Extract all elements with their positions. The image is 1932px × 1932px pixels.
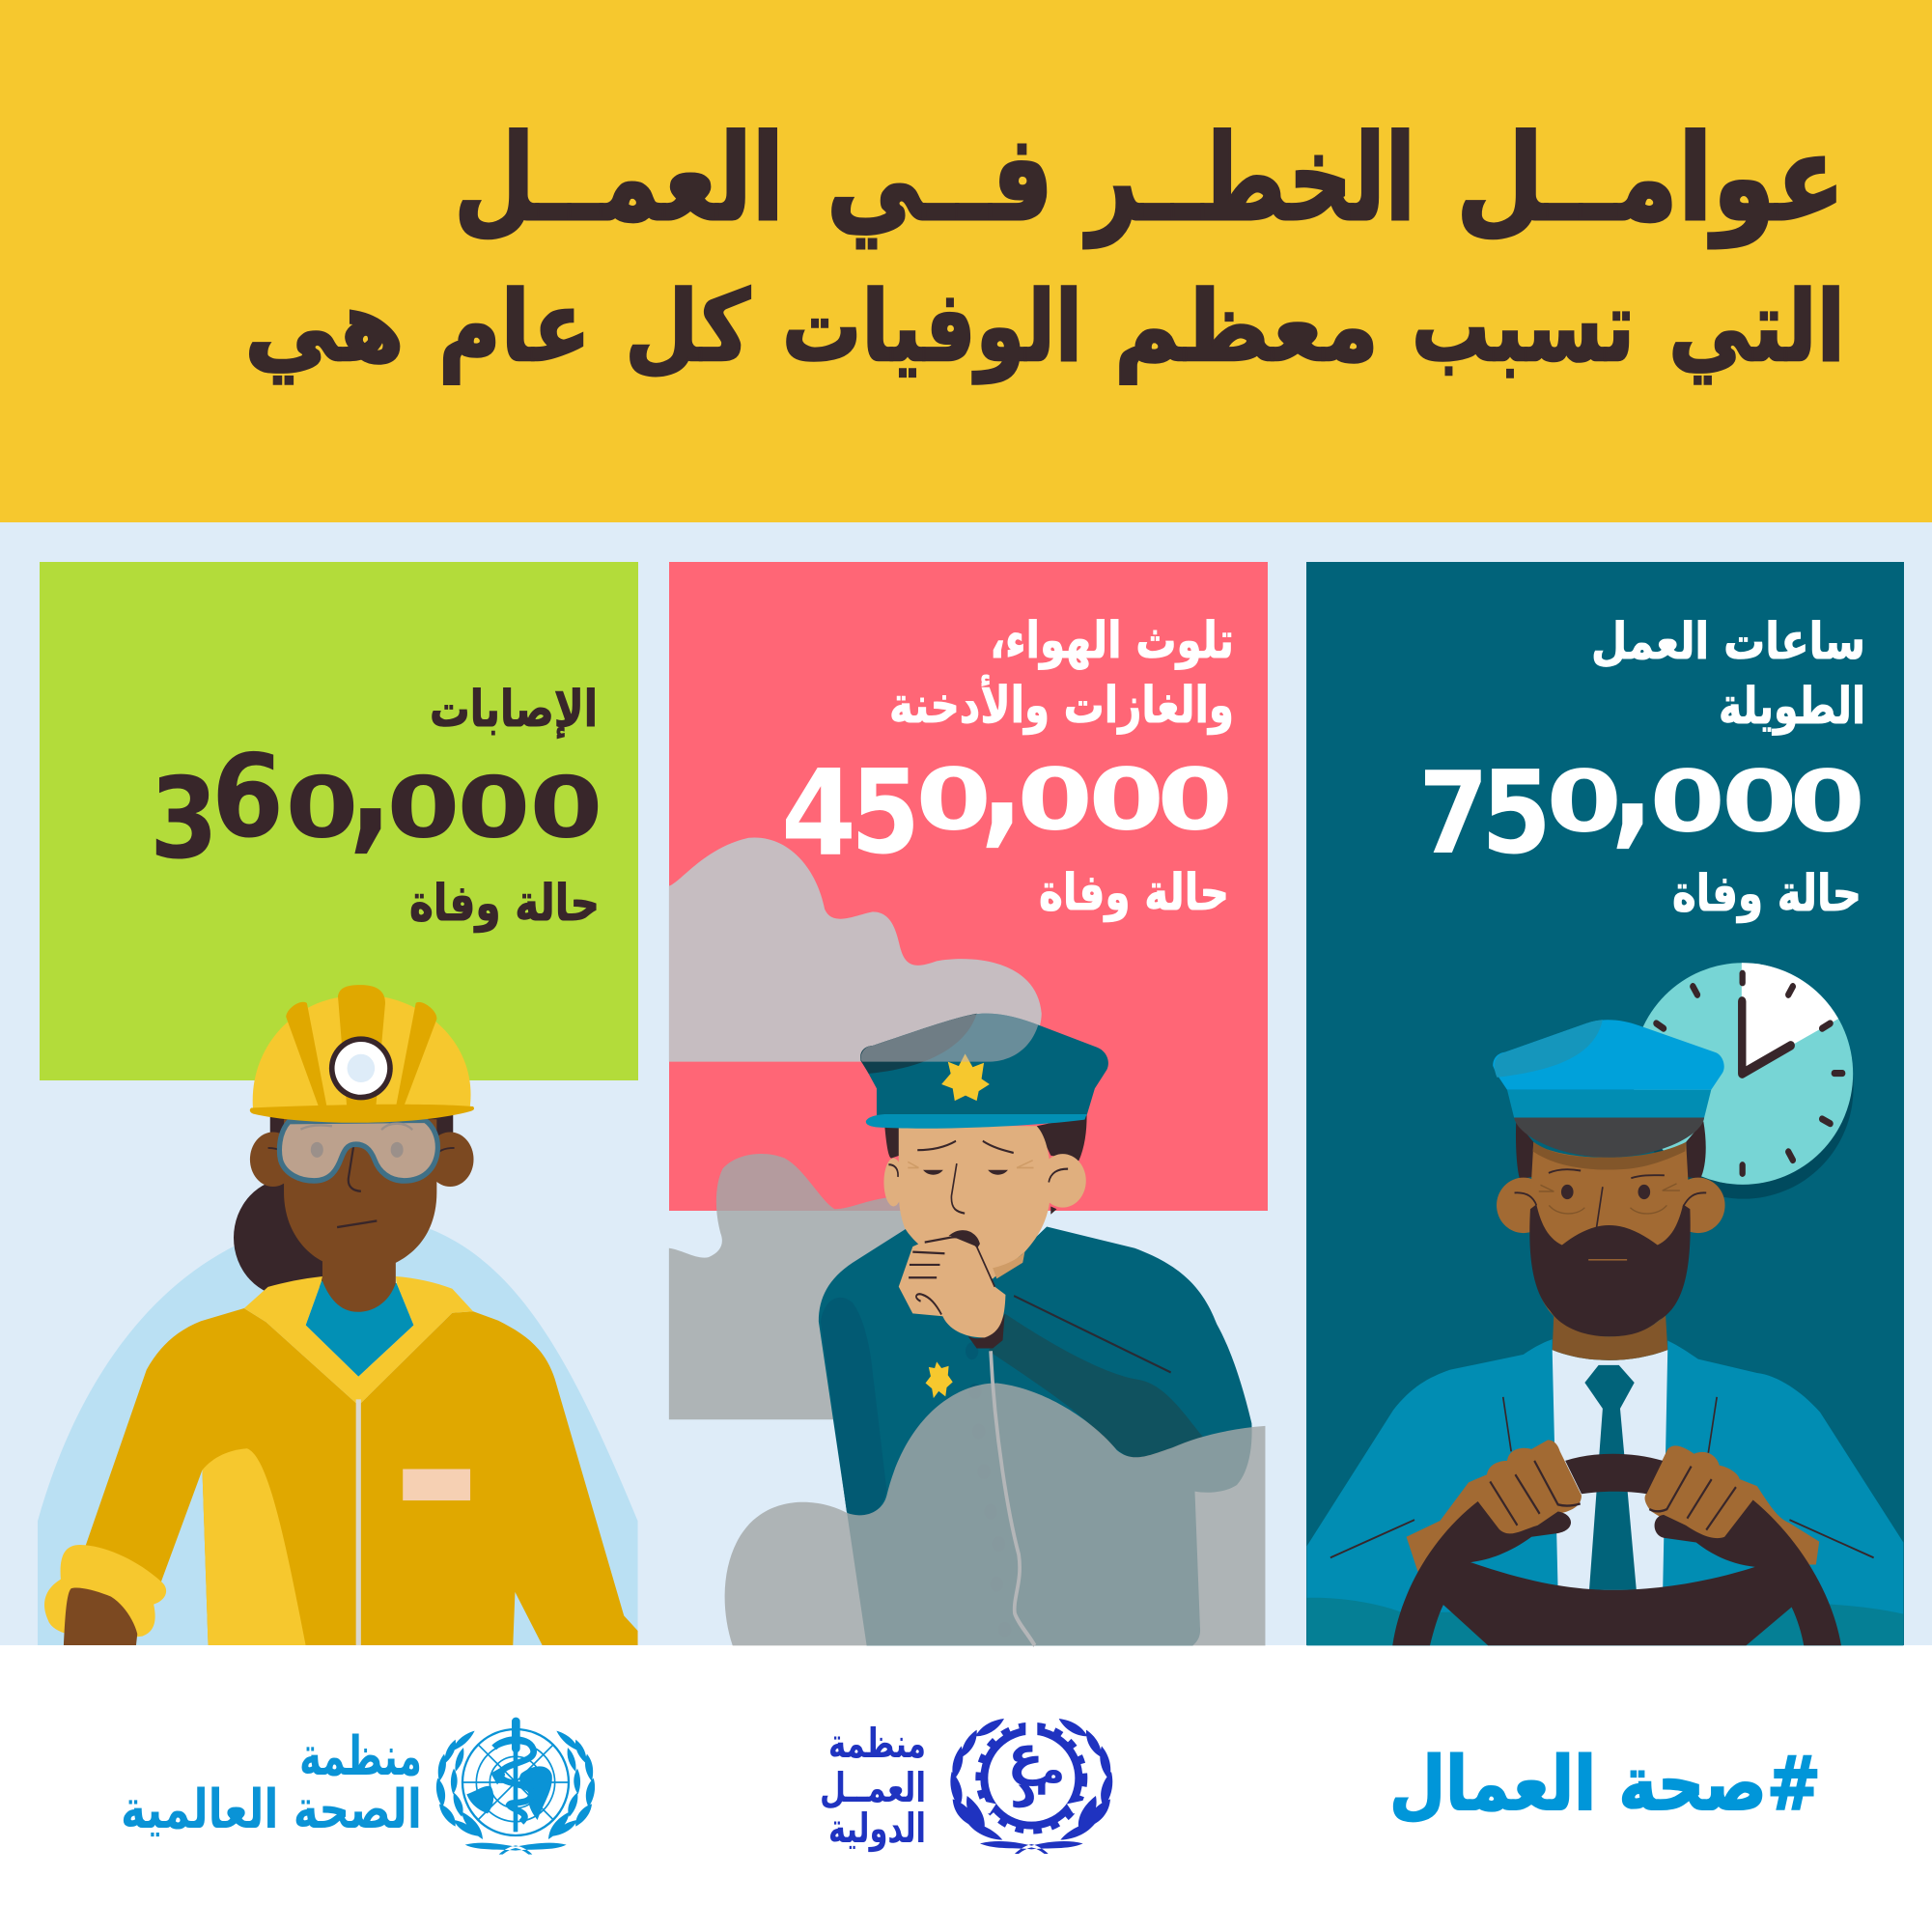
ILO name: منظمة xyxy=(828,1720,926,1767)
number: 750,000 xyxy=(1418,703,1865,881)
wreath xyxy=(436,1731,595,1855)
light blue arch xyxy=(38,1215,638,1645)
clock xyxy=(1633,963,1854,1199)
number: 750,000: 0 xyxy=(1546,752,1622,852)
number: 750,000: 0 xyxy=(1722,752,1798,852)
number: 450,000: , xyxy=(980,702,1024,862)
badge star xyxy=(926,1361,953,1398)
goggles xyxy=(279,1120,437,1181)
number: 360,000: , xyxy=(349,708,393,868)
driver cap xyxy=(1493,1020,1724,1090)
heading: air pollution, gases and fumes: تلوث الهواء، xyxy=(990,612,1234,670)
steering wheel xyxy=(1565,1454,1663,1494)
panel: injuries xyxy=(38,562,638,1645)
panel: air pollution xyxy=(669,562,1268,1645)
icon: WHO emblem xyxy=(436,1718,595,1855)
staff and serpent xyxy=(512,1718,520,1752)
number: 360,000: 6 xyxy=(211,730,284,863)
officer body xyxy=(819,1227,1252,1645)
number: 450,000: 0 xyxy=(1017,750,1093,850)
header band xyxy=(0,0,1932,522)
title line 2: كل xyxy=(625,269,750,383)
hard hat xyxy=(253,997,471,1107)
emblem initials: ع xyxy=(1008,1724,1047,1786)
hand and cuff xyxy=(967,1313,1005,1348)
number: 360,000: 0 xyxy=(458,760,530,857)
title line 2: هي xyxy=(244,269,405,384)
smoke cloud bottom xyxy=(725,1384,1265,1645)
title line 2: التي xyxy=(1668,269,1845,384)
number: 750,000: 0 xyxy=(1649,752,1725,852)
title line 1: فــي xyxy=(826,110,1053,248)
number: 750,000: 7 xyxy=(1418,747,1489,881)
number: 750,000: , xyxy=(1610,703,1655,863)
emblem initials: م xyxy=(1035,1747,1065,1795)
title line 1: عوامــل xyxy=(1456,110,1845,248)
title line 2: عام xyxy=(438,269,591,383)
title line 2: معظم xyxy=(1114,269,1379,384)
officer cap xyxy=(860,1014,1108,1115)
number: 750,000: 0 xyxy=(1789,752,1865,852)
globe xyxy=(462,1729,569,1835)
sleeve cuff and hand xyxy=(44,1545,166,1638)
number: 450,000: 5 xyxy=(851,746,920,881)
continents xyxy=(466,1766,552,1820)
number: 360,000: 0 xyxy=(386,760,460,857)
jacket xyxy=(1306,1339,1903,1645)
footer xyxy=(121,1718,1821,1855)
heading: long working hours: الطويلة xyxy=(1719,678,1865,736)
label: deaths: حالة وفاة xyxy=(409,875,600,933)
number: 450,000: 0 xyxy=(915,750,992,850)
number: 750,000: 5 xyxy=(1481,747,1552,881)
label: deaths: حالة وفاة xyxy=(1039,864,1229,922)
emblem initials: د xyxy=(1010,1758,1037,1820)
head xyxy=(884,1115,1087,1161)
smoke cloud upper xyxy=(669,837,1042,1062)
title line 1: الخطــر xyxy=(1083,110,1415,248)
beard xyxy=(1529,1204,1691,1336)
title line 2: تسبب xyxy=(1412,269,1635,383)
title line 2 xyxy=(244,269,1845,384)
hands xyxy=(1407,1440,1582,1572)
ILO name: الدولية xyxy=(828,1805,926,1853)
heading: injuries: الإصابات xyxy=(430,681,598,739)
number: 360,000: 0 xyxy=(286,760,358,857)
panel: long working hours xyxy=(1306,562,1904,1645)
shirt and tie xyxy=(1553,1350,1667,1590)
microphone cord xyxy=(991,1351,1035,1645)
heading: long working hours xyxy=(1591,613,1865,736)
number: 360,000: 3 xyxy=(150,754,218,884)
heading: long working hours: ساعات العمل xyxy=(1591,613,1865,671)
hashtag: #صحة العمال xyxy=(1389,1742,1821,1828)
smoke over cap xyxy=(861,1014,1039,1062)
number: 450,000: 0 xyxy=(1088,750,1164,850)
gear xyxy=(972,1719,1091,1831)
number: 450,000: 4 xyxy=(781,744,856,882)
WHO name xyxy=(121,1725,422,1841)
wreath xyxy=(950,1719,1112,1854)
WHO name: الصحة العالمية xyxy=(121,1778,422,1841)
illustration: miner xyxy=(38,985,638,1645)
heading: air pollution, gases and fumes: والغازات والأدخنة xyxy=(889,674,1234,735)
number: 450,000 xyxy=(781,702,1233,882)
number: 360,000 xyxy=(150,708,602,884)
smoke cloud left xyxy=(669,1154,912,1419)
number: 360,000: 0 xyxy=(529,760,602,857)
title line 2: الوفيات xyxy=(782,269,1082,384)
heading: air pollution, gases and fumes xyxy=(889,612,1234,735)
ILO name xyxy=(820,1720,926,1853)
WHO name: منظمة xyxy=(299,1725,422,1788)
head xyxy=(1553,1313,1667,1360)
title line 1 xyxy=(454,110,1845,248)
icon: ILO emblem xyxy=(950,1719,1112,1854)
title line 1: العمــل xyxy=(454,110,784,248)
illustration: driver with clock xyxy=(1306,963,1903,1645)
ILO name: العمــل xyxy=(820,1764,926,1811)
emblem initials xyxy=(1008,1724,1065,1820)
head xyxy=(250,1132,296,1187)
label: deaths: حالة وفاة xyxy=(1672,865,1862,923)
jacket xyxy=(85,1308,638,1645)
illustration: coughing officer in smoke xyxy=(669,837,1265,1645)
number: 450,000: 0 xyxy=(1157,750,1233,850)
